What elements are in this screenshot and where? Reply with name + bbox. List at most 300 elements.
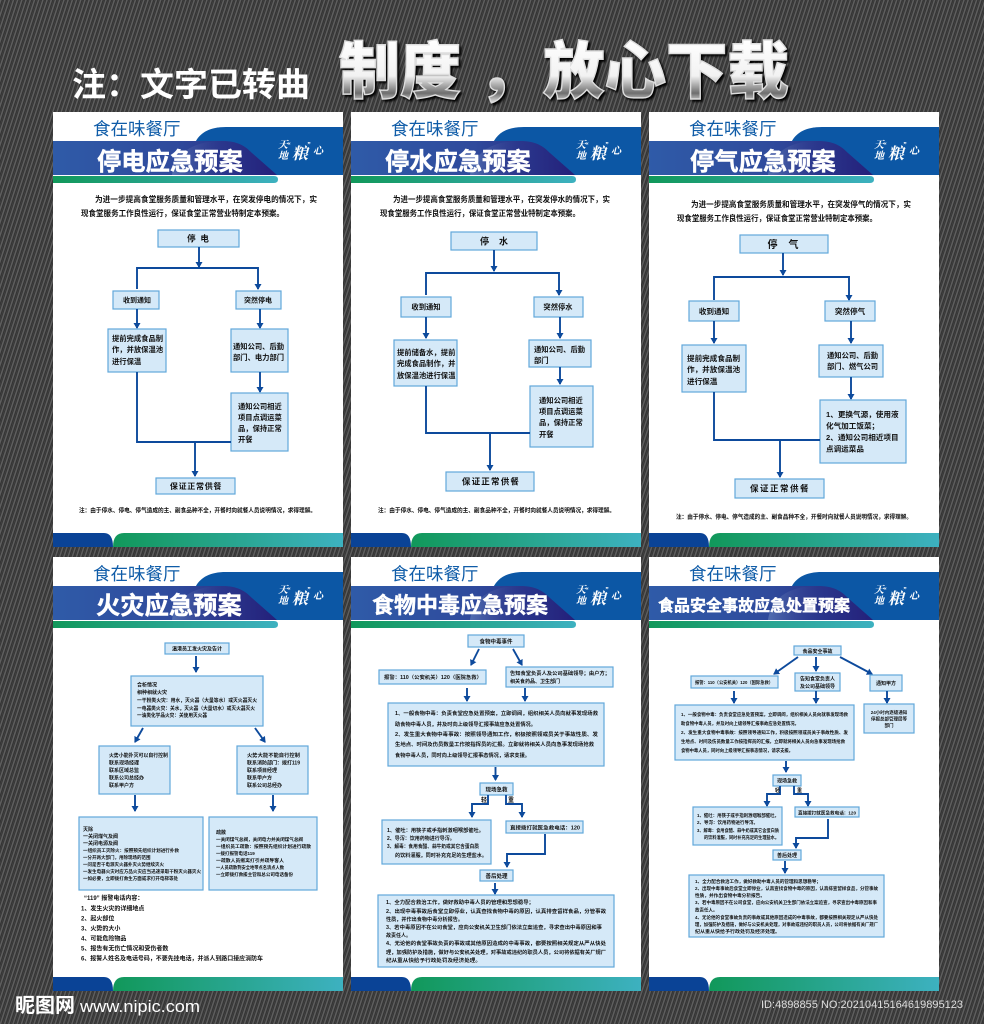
box: start	[740, 235, 828, 253]
label: mild: 轻	[775, 787, 780, 794]
box: nearby project: 通知公司相近	[539, 396, 583, 405]
header: food safety: 食品安全事故应急处置预案	[658, 596, 850, 615]
box: mild steps	[382, 820, 491, 864]
box: large fire: 联系项目经理	[247, 767, 277, 774]
header: food safety: 心	[909, 590, 921, 602]
header: food poisoning: 粮	[590, 590, 608, 608]
header: gas outage: ”	[903, 141, 907, 149]
header: gas outage: 天	[874, 139, 885, 151]
arrow: to actions	[850, 377, 852, 399]
box: small fire: 联系公司总经办	[109, 774, 144, 782]
box: aftermath: 善后处理	[485, 872, 508, 880]
box: mild steps: 的饮料灌服，同时补充充足的生理盐水。	[395, 852, 487, 859]
box: procedures: 2、发生重大食物中毒事故：按照领导通知工作，积极按照领或员关于事故性质、发	[681, 729, 849, 736]
box: start	[451, 232, 537, 250]
line: merge	[714, 392, 820, 440]
box: notify HQ: 24小时内逐级通知	[871, 709, 908, 716]
arrow: to client	[840, 657, 872, 674]
text block: 119 report contents: 4、可能危险物品	[81, 934, 126, 942]
box: report: 报警：110（公安机关）120（医院急救）	[384, 674, 482, 681]
header: power outage: 心	[313, 145, 325, 157]
footer band	[351, 977, 641, 991]
box: procedures: 食物中毒人员，同时向上级领导汇报事态情况，请求支援。	[681, 747, 793, 754]
box: sudden outage	[825, 301, 875, 321]
box: aftermath steps: 理，加强防护及措施，做好与公安机关处理，对事故或违纪的职员人员，公司将依据有关厂规厂	[386, 949, 606, 956]
box: procedures: 助食物中毒人员，并及时向上级领导汇报事故应急处置情况。	[395, 721, 536, 728]
box: evacuation	[209, 817, 317, 890]
box: small fire actions: 一发生电器火灾时应方品火灾应当迅速采取干粉灭火器灭火	[83, 868, 202, 875]
arrow: start to branch	[493, 250, 495, 271]
header: water outage: 地	[576, 150, 588, 162]
box: nearby project: 项目点调运菜	[539, 407, 583, 416]
arrow: to large fire	[255, 728, 265, 742]
box: aftermath steps: 2、出现中毒事故后食堂立即停业，认真查找食物中毒的原因，认真排查留样食品，分管事故	[695, 885, 879, 892]
arrow: client down	[886, 691, 888, 703]
box: assess: 一油类化学品火灾：关使用灭火器	[137, 712, 207, 719]
box: notify client	[870, 675, 902, 691]
header: gas outage: “	[883, 141, 887, 149]
box: procedures	[675, 705, 854, 760]
box: prepare ahead: 作，并放保温池	[687, 364, 741, 374]
header: power outage	[53, 119, 343, 183]
header: food safety: “	[883, 586, 887, 594]
flowchart: gas outage	[682, 235, 906, 498]
box: report	[691, 676, 778, 688]
text block: 119 report contents: 3、火势的大小	[81, 924, 120, 932]
box: notify client: 通知甲方	[876, 680, 896, 687]
box: first aid	[480, 783, 513, 795]
box: small fire actions: 一分开两大部门，用除现场的范围	[83, 854, 151, 861]
box: sudden outage: 突然停水	[543, 302, 573, 312]
box: guarantee: 保证正常供餐	[170, 481, 222, 491]
box: severe: 直接拨打就医急救电话：120	[510, 824, 580, 832]
panel: gas outage plan	[649, 112, 939, 547]
header: power outage: ”	[307, 141, 311, 149]
box: aftermath: 善后处理	[777, 852, 797, 859]
box: start	[158, 230, 239, 247]
box: nearby project: 开餐	[238, 435, 253, 444]
header: power outage: 粮	[292, 145, 310, 163]
box: aftermath steps: 1、全力配合救治工作，做好救助中毒人员的管理和思想稳导；	[386, 899, 534, 906]
arrows: branch	[714, 277, 849, 300]
header: water outage: 心	[611, 145, 623, 157]
box: aftermath steps: 故责任人。	[695, 906, 718, 914]
arrow: severe	[794, 786, 808, 806]
box: assess: 一干粉类火灾：用水，灭火器（大量等水）或灭火器灭火	[137, 697, 257, 704]
header: gas outage	[649, 119, 939, 183]
box: notify company: 部门、电力部门	[233, 353, 284, 362]
box: evacuation: 一拨打报警电话119	[216, 850, 255, 857]
footnote: 注：由于停水、停电、停气造成的主、副食品种不全，开餐时向就餐人员说明情况，求得理解。	[79, 506, 316, 514]
header: fire	[53, 564, 343, 628]
header: power outage: 地	[278, 150, 290, 162]
panel: fire plan	[53, 557, 343, 991]
box: aftermath steps: 4、无论他的食堂事故负责的事故或其他原因造成的中毒事故，都要按照相关规定从严从快处	[386, 940, 606, 947]
box: aftermath steps	[689, 875, 884, 937]
box: store water: 完成食品制作，并	[397, 359, 455, 368]
box: small fire actions: 一组织员工灭除火：按照预先组织计划进行扑救	[83, 847, 180, 854]
main banner heading: 放心下载	[543, 38, 789, 107]
text block: 119 report contents: 2、起火部位	[81, 914, 114, 922]
box: severe: 直接拨打就医急救电话：120	[798, 810, 856, 816]
box: notify HQ: 停报总部管理层等	[871, 716, 907, 722]
box: assess: 相种相就火灾	[137, 689, 167, 696]
header: gas outage: 粮	[888, 145, 906, 163]
box: notified: 收到通知	[123, 296, 151, 304]
arrow: to guarantee	[194, 442, 196, 476]
arrow: right down	[272, 795, 274, 811]
box: report	[379, 670, 486, 684]
arrow: start to branch	[198, 247, 200, 267]
header: food poisoning: ”	[605, 586, 609, 594]
box: inform: 告知食堂负责人	[800, 676, 835, 682]
box: mild steps: 3、解毒：食用食醋、蒜牛奶或其它含蛋白质	[387, 843, 479, 850]
header: gas outage: 停气应急预案	[690, 149, 836, 176]
line: merge	[137, 372, 231, 442]
arrow: right	[850, 321, 852, 343]
box: nearby project: 品，保持正常	[539, 418, 583, 427]
box: evacuation: 疏散	[216, 829, 226, 836]
box: notify HQ: 部门	[884, 722, 894, 729]
box: notified	[401, 297, 451, 317]
arrow: severe to aftermath	[796, 819, 828, 848]
arrows: branch	[426, 273, 559, 295]
header: power outage: 食在味餐厅	[93, 119, 180, 139]
box: small fire actions	[79, 817, 203, 890]
box: aftermath steps: 性质，并作出食物中毒分析报告。	[386, 916, 463, 923]
arrow: severe to aftermath	[507, 834, 545, 867]
intro text	[380, 194, 610, 218]
box: aftermath steps: 3、若中毒原因不在公司食堂，应向公安机关卫生部门依法立案追查，寻求查出中毒原因和事	[695, 899, 877, 906]
box: procedures: 1、一般食物中毒：负责食堂应急处置预案，立即调阅，组织相关人员向就事发现场救	[681, 711, 848, 718]
box: prepare ahead: 进行保温	[112, 357, 142, 366]
arrow: severe	[506, 795, 522, 817]
box: aftermath steps: 4、无论他的食堂事故负责的事故或其他原因造成的中毒事故，都要按照相关规定从严从快处	[695, 914, 879, 921]
watermark: site logo	[15, 995, 200, 1017]
box: inform	[795, 673, 840, 691]
arrow: report down	[466, 688, 468, 701]
box: actions: 2、通知公司相近项目	[826, 432, 899, 442]
header: power outage: 天	[278, 139, 289, 151]
intro text: 为进一步提高食堂服务质量和管理水平，在突发停气的情况下，实	[691, 199, 911, 209]
box: small fire actions: 一如必要，立即拨打救生方面或求打开电梯等处	[83, 875, 179, 882]
box: discovery: 温港员工发火灾及告计	[172, 646, 222, 652]
header: food safety: 天	[874, 584, 885, 596]
box: actions: 点调运菜品	[826, 444, 864, 454]
flowchart: food safety	[675, 646, 914, 937]
arrow: mild	[472, 795, 488, 817]
arrow: mild	[767, 786, 780, 806]
box: notified: 收到通知	[699, 306, 729, 316]
box: start: 停 气	[767, 238, 799, 251]
header: fire: “	[287, 586, 291, 594]
text block: 119 report contents: “119” 报警电话内容：	[84, 894, 143, 902]
box: guarantee	[735, 479, 824, 498]
watermark: site logo: www.nipic.com	[79, 997, 200, 1016]
intro text: 为进一步提高食堂服务质量和管理水平，在突发停水的情况下，实	[393, 194, 610, 204]
arrow: to inform	[513, 649, 522, 665]
arrow: to report	[774, 657, 798, 674]
arrow: right	[559, 317, 561, 338]
box: assess: 一电器类火灾：关水，灭火器（大量切水）或灭火器灭火	[137, 705, 255, 712]
box: guarantee: 保证正常供餐	[462, 476, 520, 486]
box: mild steps: 1、催吐：用筷子或手指刺激咽喉部催吐。	[697, 812, 779, 819]
box: notify company	[231, 329, 288, 372]
box: evacuation: 一人员疏散到安全地带点名清点人数	[216, 864, 284, 871]
header: food safety: 粮	[888, 590, 906, 608]
box: aftermath steps: 3、若中毒原因不在公司食堂，应向公安机关卫生部门依法立案追查，寻求查出中毒原因和事	[386, 924, 602, 931]
box: procedures: 助食物中毒人员，并及时向上级领导汇报事故应急处置情况。	[681, 720, 799, 727]
box: small fire: 联系甲户方	[109, 782, 134, 789]
panel: water outage plan	[351, 112, 641, 547]
arrow: inform down	[524, 688, 526, 701]
box: evacuation: 一疏散人员撤离打引并疏导客人	[216, 857, 285, 864]
flowchart: food poisoning	[378, 635, 614, 967]
box: nearby project: 开餐	[539, 430, 554, 439]
box: procedures: 食物中毒人员，同时向上级领导汇报事态情况，请求支援。	[395, 752, 530, 759]
box: evacuation: 一组织员工疏散：按照预先组织计划进行疏散	[216, 843, 312, 850]
box: prepare ahead: 提前完成食品制	[687, 353, 741, 363]
box: assess	[131, 676, 263, 726]
label: severe: 重	[797, 787, 802, 794]
box: actions: 1、更换气源，使用液	[826, 409, 899, 419]
header: fire: 火灾应急预案	[96, 593, 242, 620]
box: notify company: 通知公司、后勤	[534, 345, 585, 354]
intro text: 现食堂服务工作良性运行，保证食堂正常营业特制定本预案。	[81, 208, 284, 218]
box: small fire actions: 一关闭电源及阀	[83, 840, 118, 847]
box: guarantee	[156, 478, 235, 494]
box: nearby project	[530, 386, 593, 447]
box: notify company	[819, 345, 883, 377]
box: sudden outage: 突然停电	[244, 296, 272, 304]
box: aftermath steps: 纪从重从快给予行政处罚及经济处理。	[695, 928, 780, 935]
box: small fire	[99, 746, 170, 794]
header: water outage: 粮	[590, 145, 608, 163]
box: store water: 提前储备水，提前	[397, 348, 455, 357]
box: report: 报警：110（公安机关）120（国际急救）	[695, 679, 773, 686]
box: nearby project: 品，保持正常	[238, 424, 282, 433]
panel: food poisoning plan	[351, 557, 641, 991]
box: severe	[795, 807, 859, 817]
header: fire: 心	[313, 590, 325, 602]
box: store water: 放保温池进行保温	[397, 371, 456, 380]
box: notify company: 通知公司、后勤	[233, 342, 284, 351]
box: first aid: 现场急救	[777, 778, 797, 784]
box: mild steps: 1、催吐：用筷子或手指刺激咽喉部催吐。	[387, 827, 484, 834]
header: water outage: “	[585, 141, 589, 149]
box: mild steps: 3、解毒：食用食醋、蒜牛奶或其它含蛋白质	[697, 827, 779, 834]
header: food safety: 地	[874, 595, 886, 607]
arrow: to assess	[195, 656, 197, 672]
flowchart: water outage	[394, 232, 593, 491]
box: sudden outage	[534, 297, 583, 317]
box: notify HQ	[864, 704, 914, 733]
arrow: to first aid	[785, 761, 787, 772]
box: prepare ahead: 提前完成食品制	[112, 334, 163, 343]
panel: food safety plan	[649, 557, 939, 991]
box: aftermath steps: 1、全力配合救治工作，做好救助中毒人员的管理和思想稳导；	[695, 878, 821, 885]
box: mild steps: 的饮料灌服，同时补充充足的生理盐水。	[704, 834, 779, 841]
box: aftermath steps: 理，加强防护及措施，做好与公安机关处理，对事故或违纪的职员人员，公司将依据有关厂规厂	[695, 921, 878, 928]
box: store water	[394, 340, 457, 386]
note heading: 注：文字已转曲	[72, 66, 310, 103]
header: water outage: 天	[576, 139, 587, 151]
box: incident	[468, 635, 524, 647]
watermark: site logo: 昵图网	[15, 995, 75, 1017]
arrow: to report	[471, 649, 479, 665]
box: inform: 及公司基础领导	[800, 683, 835, 690]
box: small fire actions: 灭除	[83, 826, 93, 833]
box: guarantee	[446, 472, 534, 491]
box: procedures	[388, 703, 604, 766]
header: food poisoning: 地	[576, 595, 588, 607]
arrows: branch	[137, 268, 258, 289]
arrow: to aftermath steps	[784, 861, 786, 873]
arrow: to guarantee	[489, 433, 491, 470]
box: notify company	[529, 340, 591, 367]
arrow: right	[259, 309, 261, 328]
footer band	[649, 533, 939, 547]
header: food poisoning: 天	[576, 584, 587, 596]
line: merge	[426, 386, 530, 433]
header: gas outage: 食在味餐厅	[689, 119, 776, 139]
footer band	[351, 533, 641, 547]
header: food poisoning: 食物中毒应急预案	[372, 593, 548, 618]
arrow: to aftermath steps	[494, 883, 496, 894]
header: water outage: ”	[605, 141, 609, 149]
footnote: 注：由于停水、停电、停气造成的主、副食品种不全，开餐时向就餐人员说明情况，求得理解。	[676, 513, 912, 521]
box: aftermath steps: 纪从重从快给予行政处罚及经济处理。	[386, 957, 481, 964]
arrow: to guarantee	[779, 440, 781, 477]
arrow: start to branch	[782, 253, 784, 275]
header: fire: 食在味餐厅	[93, 564, 180, 584]
box: discovery	[165, 643, 229, 654]
intro text	[81, 194, 317, 218]
text block: 119 report contents: 6、报警人姓名及电话号码，不要先挂电话，并派人到路口接应消防车	[81, 954, 263, 962]
header: food poisoning: 心	[611, 590, 623, 602]
header: power outage: “	[287, 141, 291, 149]
box: prepare ahead: 作，并放保温池	[112, 345, 164, 354]
arrow: left	[425, 317, 427, 338]
arrow: left down	[134, 795, 136, 811]
box: incident: 食物中毒事件	[479, 638, 513, 646]
arrow: to inform	[815, 657, 817, 671]
box: notified	[113, 291, 159, 309]
box: start: 停 水	[480, 236, 508, 246]
header: food poisoning: 食在味餐厅	[391, 564, 478, 584]
box: aftermath	[773, 850, 801, 860]
header: gas outage: 心	[909, 145, 921, 157]
main banner heading: 制度	[339, 38, 461, 107]
box: inform	[506, 667, 613, 687]
header: fire: ”	[307, 586, 311, 594]
header: food safety: ”	[903, 586, 907, 594]
box: nearby project	[231, 393, 288, 451]
box: inform: 相关食药品、卫生部门	[510, 678, 560, 685]
header: fire: 粮	[292, 590, 310, 608]
box: evacuation: 一关闭煤气总阀，关闭电力并关闭煤气总阀	[216, 836, 304, 843]
header: food poisoning	[351, 564, 641, 628]
box: aftermath steps: 性质，并作出食物中毒分析报告。	[695, 892, 765, 899]
box: large fire: 联系公司总经办	[247, 782, 282, 789]
intro text: 现食堂服务工作良性运行，保证食堂正常营业特制定本预案。	[677, 213, 877, 223]
label: mild: 轻	[481, 796, 487, 804]
box: nearby project: 项目点调运菜	[238, 413, 282, 422]
box: small fire actions: 一关闭煤气及阀	[83, 833, 118, 840]
header: water outage: 停水应急预案	[385, 149, 531, 176]
box: incident: 食品安全事故	[802, 648, 833, 655]
box: mild steps: 2、导泻：饮用药物进行导泻。	[387, 835, 455, 842]
watermark: image id: ID:4898855 NO:20210415164619895123	[761, 999, 963, 1011]
intro text: 现食堂服务工作良性运行，保证食堂正常营业特制定本预案。	[380, 208, 580, 218]
box: small fire: 火势小能扑灭可以自行控制	[109, 752, 168, 759]
header: water outage: 食在味餐厅	[391, 119, 478, 139]
header: food poisoning: “	[585, 586, 589, 594]
arrow: to nearby project	[559, 367, 561, 384]
header: fire: 天	[278, 584, 289, 596]
box: aftermath steps	[378, 895, 614, 967]
arrow: to small fire	[135, 728, 143, 742]
box: start: 停 电	[187, 234, 209, 244]
box: actions: 化气加工饭菜；	[826, 420, 879, 430]
box: prepare ahead: 进行保温	[687, 376, 718, 386]
box: notify company: 通知公司、后勤	[827, 351, 878, 360]
box: small fire actions: 一问是否干电源灭火器扑灭火势继续灭火	[83, 861, 164, 868]
header: water outage	[351, 119, 641, 183]
box: first aid	[773, 775, 801, 786]
box: sudden outage	[236, 291, 281, 309]
box: notify company: 部门、燃气公司	[827, 362, 878, 371]
header: food safety: 食在味餐厅	[689, 564, 776, 584]
main banner heading: ，	[478, 38, 540, 107]
box: mild steps: 2、导泻：饮用药物进行导泻。	[697, 819, 758, 826]
box: aftermath steps: 故责任人。	[386, 932, 411, 939]
box: prepare ahead	[682, 345, 746, 392]
header: fire: 地	[278, 595, 290, 607]
box: incident	[794, 646, 841, 655]
arrow: inform down	[815, 691, 817, 703]
box: procedures: 1、一般食物中毒：负责食堂应急处置预案，立即调阅，组织相关人员向就事发现场救	[395, 710, 598, 717]
box: large fire: 火势大能不能自行控制	[247, 752, 300, 759]
box: first aid: 现场急救	[485, 786, 508, 794]
box: assess: 合析情况	[137, 682, 157, 688]
footer band	[53, 533, 343, 547]
box: procedures: 生地点、时间及伤员数量工作按指挥员的汇报。立即就将相关人员向急事发现场抢救	[395, 741, 594, 748]
text block: 119 report contents: 1、发生火灾的详细地点	[81, 904, 144, 912]
panel: power outage plan	[53, 112, 343, 547]
box: aftermath steps: 2、出现中毒事故后食堂立即停业，认真查找食物中毒的原因，认真排查留样食品，分管事故	[386, 908, 606, 915]
arrow: to nearby project	[259, 372, 261, 392]
box: sudden outage: 突然停气	[835, 306, 866, 316]
flowchart: fire	[79, 643, 317, 890]
arrow: report down	[733, 691, 735, 703]
header: food safety	[649, 564, 939, 628]
box: aftermath	[480, 870, 513, 881]
box: mild steps	[693, 807, 782, 845]
box: guarantee: 保证正常供餐	[750, 484, 810, 494]
box: small fire: 联系现场经理	[109, 760, 139, 766]
text block: 119 report contents: 5、报告有无伤亡情况和受伤者数	[81, 944, 168, 952]
box: notified: 收到通知	[411, 302, 441, 312]
box: procedures: 生地点、时间及伤员数量工作按指挥员的汇报。立即就将相关人员向急事发现场抢救	[681, 738, 845, 745]
box: large fire	[237, 746, 308, 794]
box: severe	[506, 821, 583, 833]
arrow: left	[136, 309, 138, 328]
intro text	[677, 199, 911, 223]
header: gas outage: 地	[874, 150, 886, 162]
box: large fire: 联系消防部门：拨打119	[247, 760, 300, 766]
box: notify company: 部门	[534, 356, 549, 365]
